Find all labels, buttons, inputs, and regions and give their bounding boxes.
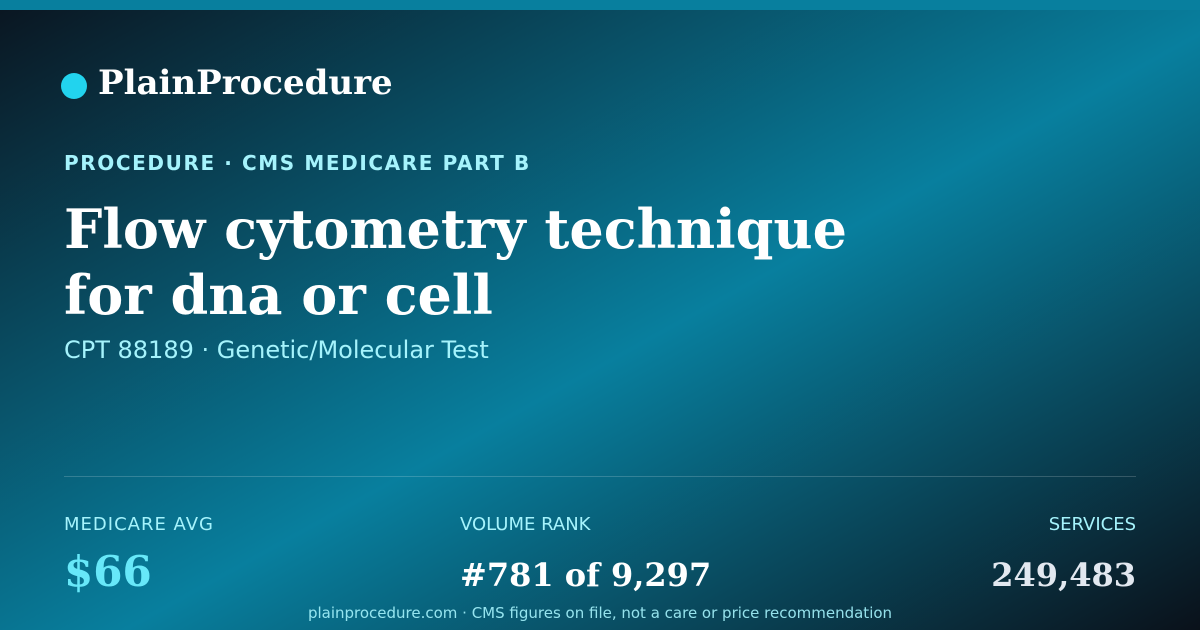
brand logo	[61, 63, 393, 103]
title: for dna or cell	[64, 263, 493, 327]
stat value: #781 of 9,297	[460, 556, 711, 594]
title: Flow cytometry technique	[64, 197, 847, 261]
stat: volume rank	[460, 514, 711, 594]
brand name: PlainProcedure	[98, 63, 393, 103]
eyebrow label: PROCEDURE · CMS MEDICARE PART B	[64, 151, 531, 175]
stat label: MEDICARE AVG	[64, 514, 214, 535]
icon: brand dot	[61, 73, 87, 99]
title	[64, 197, 847, 327]
stat: services	[991, 514, 1136, 594]
top accent bar	[0, 0, 1200, 10]
stat value: $66	[64, 547, 152, 596]
footer note: plainprocedure.com · CMS figures on file, not a care or price recommendation	[308, 604, 892, 622]
subtitle: CPT 88189 · Genetic/Molecular Test	[64, 336, 489, 364]
stat label: VOLUME RANK	[460, 514, 590, 535]
divider	[64, 476, 1136, 477]
stat value: 249,483	[991, 556, 1136, 594]
stat: medicare average	[64, 514, 214, 596]
stat label: SERVICES	[1049, 514, 1136, 535]
